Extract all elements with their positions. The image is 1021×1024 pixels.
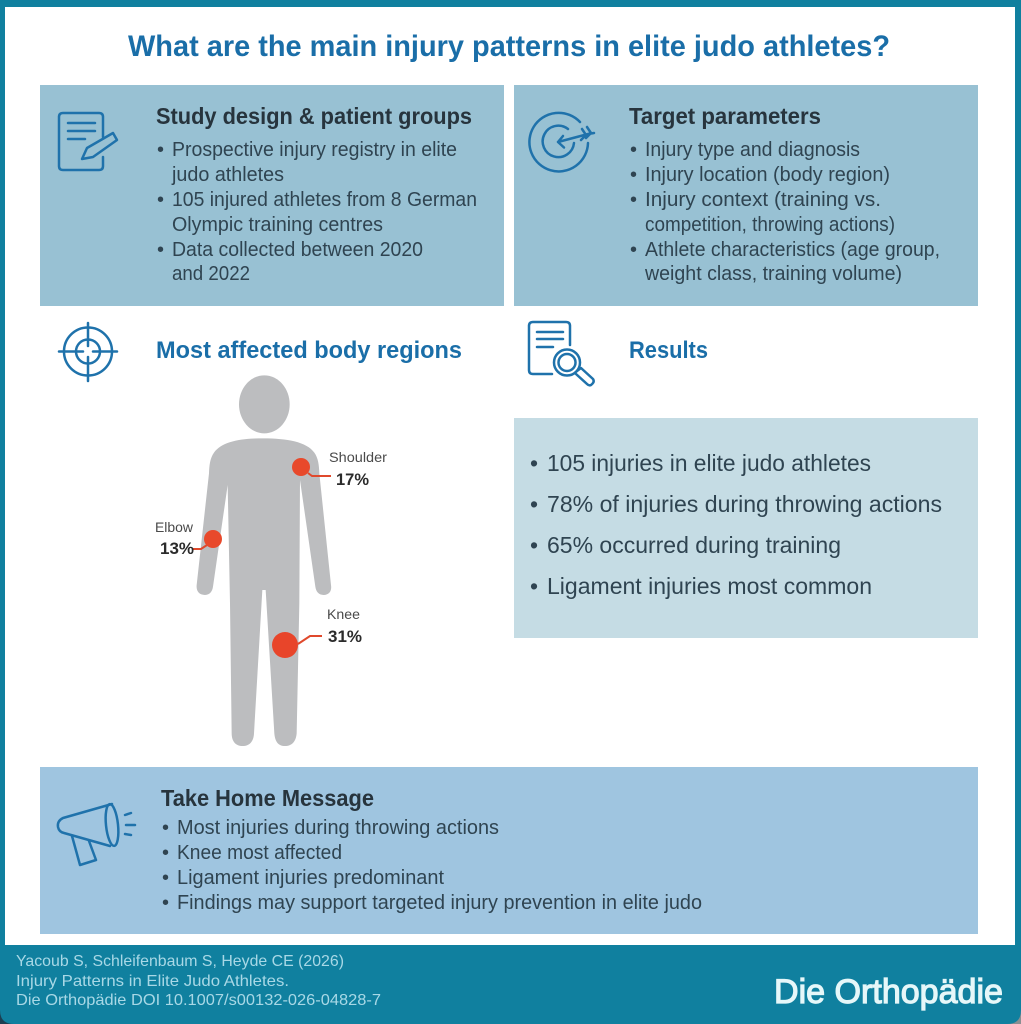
take home bullet list	[162, 817, 702, 914]
study design bullet list: Data collected between 2020	[172, 239, 423, 261]
take home bullet list: Most injuries during throwing actions	[177, 817, 499, 839]
heading: results: Results	[629, 337, 708, 364]
target parameters bullet list: Injury type and diagnosis	[645, 139, 860, 161]
target parameters bullet list: Injury context (training vs.	[645, 189, 881, 211]
marker: shoulder	[292, 450, 388, 489]
icon: crosshair	[59, 323, 117, 381]
panel: take home message	[40, 767, 978, 934]
take home bullet list: •	[162, 817, 169, 839]
heading: target parameters: Target parameters	[629, 103, 821, 129]
panel: target parameters	[514, 85, 978, 306]
footer citation: Yacoub S, Schleifenbaum S, Heyde CE (2026)	[16, 953, 344, 970]
study design bullet list: Olympic training centres	[172, 214, 383, 236]
study design bullet list: •	[157, 189, 164, 211]
target parameters bullet list: •	[630, 139, 637, 161]
result bullet list: •	[530, 491, 538, 517]
target parameters bullet list: •	[630, 189, 637, 211]
take home bullet list: Findings may support targeted injury prevention in elite judo	[177, 892, 702, 914]
study design bullet list: and 2022	[172, 263, 250, 285]
result bullet list: •	[530, 573, 538, 599]
panel: results	[514, 418, 978, 638]
study design bullet list: •	[157, 139, 164, 161]
panel: study design and patient groups	[40, 85, 504, 306]
heading: study design: Study design & patient groups	[156, 103, 472, 129]
result bullet list	[530, 450, 942, 599]
marker: knee: 31%	[328, 627, 362, 646]
result bullet list: 105 injuries in elite judo athletes	[547, 450, 871, 476]
study design bullet list: 105 injured athletes from 8 German	[172, 189, 477, 211]
chart: body diagram	[155, 375, 388, 746]
marker: elbow: 13%	[160, 539, 194, 558]
take home bullet list: Knee most affected	[177, 842, 342, 864]
target parameters bullet list: Athlete characteristics (age group,	[645, 239, 940, 261]
marker: knee: Knee	[327, 607, 360, 622]
marker: elbow	[155, 520, 222, 558]
footer citation	[16, 953, 381, 1009]
target parameters bullet list: competition, throwing actions)	[645, 214, 895, 236]
target parameters bullet list: weight class, training volume)	[644, 263, 902, 285]
result bullet list: •	[530, 532, 538, 558]
marker: elbow: Elbow	[155, 520, 193, 535]
study design bullet list: judo athletes	[171, 164, 284, 186]
target parameters bullet list: •	[630, 239, 637, 261]
take home bullet list: •	[162, 892, 169, 914]
icon: target with arrow	[529, 113, 594, 171]
icon: megaphone	[58, 803, 135, 865]
heading: take home message: Take Home Message	[161, 785, 374, 811]
heading: most affected body regions: Most affected body regions	[156, 337, 462, 364]
body silhouette	[197, 375, 331, 746]
result bullet list: 78% of injuries during throwing actions	[547, 491, 942, 517]
marker: knee	[272, 607, 362, 658]
target parameters bullet list	[630, 139, 940, 285]
result bullet list: •	[530, 450, 538, 476]
target parameters bullet list: Injury location (body region)	[645, 164, 890, 186]
icon: document with pen	[59, 113, 117, 170]
footer citation: Injury Patterns in Elite Judo Athletes.	[16, 973, 289, 990]
result bullet list: Ligament injuries most common	[547, 573, 872, 599]
study design bullet list: Prospective injury registry in elite	[172, 139, 457, 161]
icon: document with magnifier	[529, 322, 594, 385]
take home bullet list: •	[162, 842, 169, 864]
marker: shoulder: 17%	[336, 470, 369, 489]
result bullet list: 65% occurred during training	[547, 532, 841, 558]
study design bullet list: •	[157, 239, 164, 261]
take home bullet list: •	[162, 867, 169, 889]
title: What are the main injury patterns in elite judo athletes?	[128, 30, 890, 63]
footer journal name: Die Orthopädie	[774, 973, 1003, 1011]
study design bullet list	[157, 139, 477, 285]
footer citation: Die Orthopädie DOI 10.1007/s00132-026-04828-7	[16, 992, 381, 1009]
take home bullet list: Ligament injuries predominant	[177, 867, 444, 889]
target parameters bullet list: •	[630, 164, 637, 186]
marker: shoulder: Shoulder	[329, 450, 388, 465]
